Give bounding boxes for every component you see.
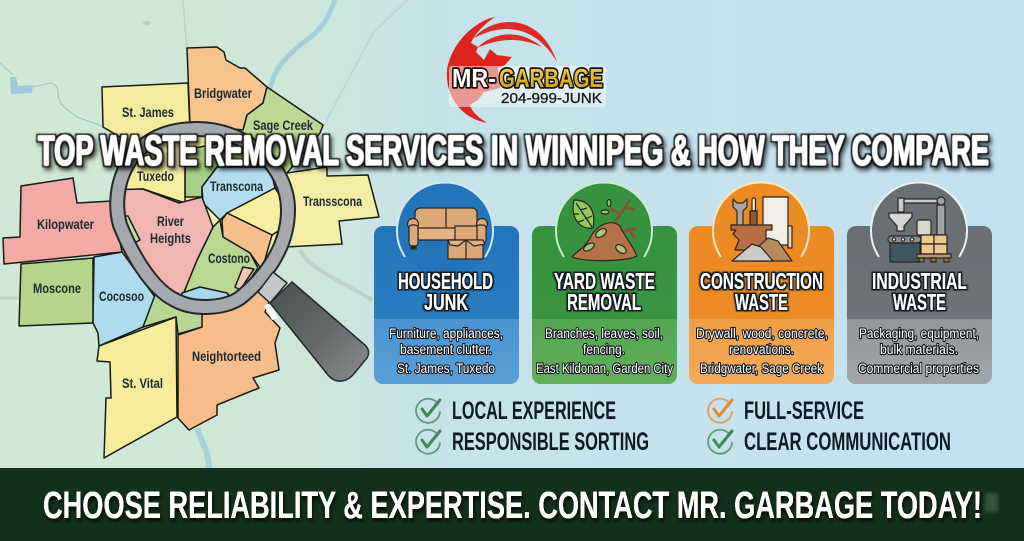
icon disc: [397, 182, 493, 277]
card description: Bridgwater, Sage Creek: [700, 361, 823, 376]
lens region: River Heights: [125, 188, 214, 294]
card body: [532, 226, 677, 384]
card description: St. James, Tuxedo: [397, 361, 495, 376]
card description: Furniture, appliances,: [389, 326, 503, 341]
icon disc: [713, 182, 809, 277]
card heading: [554, 268, 655, 315]
check item: local experience: LOCAL EXPERIENCE: [452, 397, 616, 425]
card heading: [700, 268, 823, 315]
lens region: Costono: Costono: [208, 251, 250, 266]
lens region: River Heights: River: [157, 214, 185, 229]
region: St. James: [102, 83, 190, 200]
region: Neightorteed: [178, 288, 280, 430]
lens region: Transcona: [202, 167, 275, 220]
icon: sofa and box: [408, 208, 488, 259]
logo backdrop: [449, 66, 606, 107]
card heading: CONSTRUCTION: [700, 268, 823, 294]
handle: [258, 272, 369, 381]
lens region: blue bay: [181, 286, 230, 299]
lens region: River Heights: Heights: [150, 231, 191, 246]
card heading: [398, 268, 493, 315]
card description: Drywall, wood, concrete,: [696, 326, 828, 341]
icon disc: [556, 182, 652, 277]
region: Bridgwater: [187, 47, 267, 130]
card body: [689, 226, 834, 384]
card body: [847, 226, 992, 384]
card heading: HOUSEHOLD: [398, 268, 493, 294]
card description: renovations.: [729, 342, 794, 357]
card description: [389, 326, 503, 376]
footer banner: [0, 468, 1024, 541]
logo wordmark MR-: MR-: [452, 63, 496, 93]
base map: rivers and roads: [0, 0, 407, 468]
region: Kilopwater: Kilopwater: [37, 217, 95, 232]
check item: responsible sorting: RESPONSIBLE SORTING: [452, 428, 649, 456]
check item: local experience: [416, 397, 616, 425]
card description: basement clutter.: [400, 342, 492, 357]
card description: Branches, leaves, soil,: [545, 326, 663, 341]
icon: factory conveyor and boxes: [888, 197, 951, 262]
lens ring: [117, 129, 288, 307]
icon: tools, drywall and rubble: [731, 197, 792, 261]
check item: responsible sorting: [416, 428, 649, 456]
card description: [696, 326, 828, 376]
card heading: WASTE: [893, 289, 946, 315]
region: Transscona: Transscona: [303, 194, 362, 209]
region: Sage Creek: [190, 87, 323, 215]
panel: industrial waste: [847, 182, 992, 384]
region: St. Vital: [97, 317, 177, 458]
region: Moscone: Moscone: [33, 281, 81, 296]
check item: clear communication: [708, 428, 951, 456]
region: Neightorteed: Neightorteed: [192, 349, 261, 364]
lens region: Tuxedo: [126, 167, 186, 202]
card heading: JUNK: [424, 289, 468, 315]
card body: [374, 226, 519, 384]
logo: red maple crescent: [447, 17, 512, 123]
magnifying glass: [100, 120, 369, 381]
icon: leaves, branches and soil: [572, 200, 637, 261]
lens region: green column: [186, 143, 250, 198]
card description: East Kildonan, Garden City: [536, 361, 673, 376]
check item: full-service: FULL-SERVICE: [744, 397, 864, 425]
region: Cocosoo: [93, 252, 155, 346]
region: Sage Creek: Sage Creek: [253, 118, 313, 133]
card description: Packaging, equipment,: [859, 326, 979, 341]
lens region: orange wedge: [222, 213, 272, 270]
panel: construction waste: [689, 182, 834, 384]
card heading: WASTE: [735, 289, 788, 315]
lens region: Costono: [185, 220, 259, 295]
region: Moscone: [19, 258, 93, 326]
card description: [858, 326, 979, 376]
card description: bulk materials.: [880, 342, 958, 357]
card heading: REMOVAL: [567, 289, 641, 315]
lens region: Tuxedo: Tuxedo: [137, 169, 174, 184]
card heading: INDUSTRIAL: [872, 268, 967, 294]
icon disc: [871, 182, 967, 277]
card description: Commercial properties: [858, 361, 979, 376]
card heading: YARD WASTE: [554, 268, 655, 294]
logo wordmark GARBAGE: GARBAGE: [499, 63, 603, 93]
region: southern green district: [143, 295, 204, 334]
region: Kilopwater: [3, 178, 122, 264]
lens region: Transcona: Transcona: [210, 179, 263, 194]
logo phone number: 204-999-JUNK: [501, 91, 602, 107]
lens region: yellow wedge: [226, 188, 278, 236]
region: St. James: St. James: [122, 105, 174, 120]
checklist: benefits: [416, 397, 951, 456]
logo: swooshes: [474, 22, 557, 62]
card description: [536, 326, 673, 376]
panel: household junk: [374, 182, 519, 384]
lens region: small green pocket: [126, 215, 141, 242]
region: St. Vital: St. Vital: [122, 376, 163, 391]
region: Cocosoo: Cocosoo: [99, 289, 144, 304]
card description: fencing.: [583, 342, 625, 357]
check item: full-service: [708, 397, 864, 425]
region: Bridgwater: Bridgwater: [194, 86, 253, 101]
panel: yard waste removal: [532, 182, 677, 384]
lens contents: [125, 137, 278, 299]
region: Transscona: [270, 167, 379, 247]
map: Winnipeg neighbourhoods: [3, 47, 379, 458]
logo: Mr. Garbage: [447, 17, 606, 123]
lens region: pale pocket: [235, 267, 254, 290]
card heading: [872, 268, 967, 315]
